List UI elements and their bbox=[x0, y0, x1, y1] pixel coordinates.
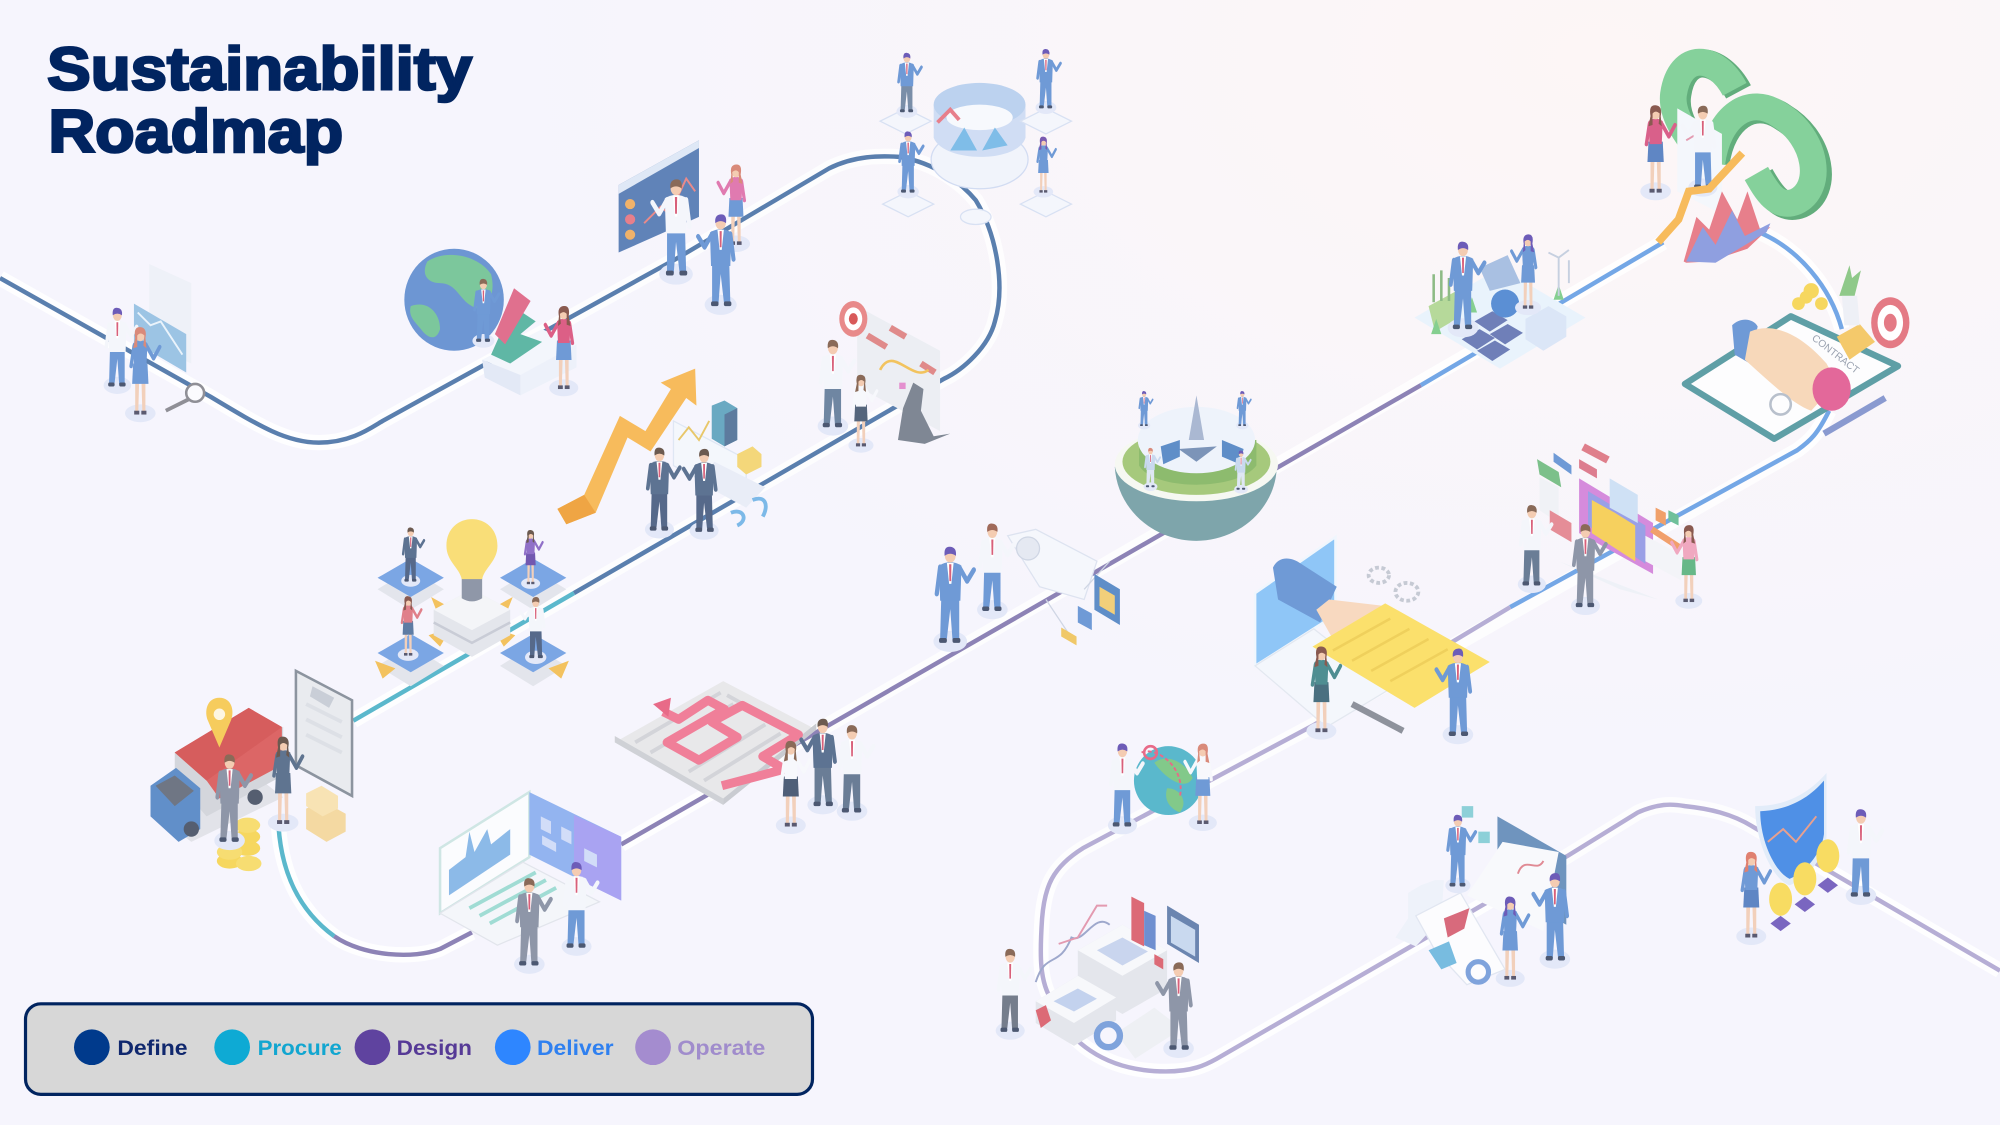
illustration: design monitor with cards bbox=[1518, 443, 1702, 615]
illustration: data board with team bbox=[619, 140, 750, 315]
path segment: deliver bbox=[1421, 232, 1842, 607]
illustration: maze bbox=[615, 681, 873, 834]
illustration: delivery truck and clipboard bbox=[151, 671, 352, 871]
illustration: eco platform bbox=[1415, 234, 1585, 369]
path segment: procure bbox=[278, 593, 574, 936]
title bbox=[47, 35, 473, 165]
legend item: define bbox=[74, 1029, 188, 1065]
illustration: analysts at chart bbox=[104, 264, 204, 422]
illustration: green cycle arrows and charts bbox=[1640, 62, 1818, 263]
title: Sustainability bbox=[47, 35, 473, 102]
legend item: design: Design bbox=[397, 1035, 472, 1060]
illustration: contract handshake bbox=[1685, 265, 1909, 439]
path segment: operate bbox=[1041, 607, 2000, 1071]
legend item: deliver bbox=[495, 1029, 614, 1065]
title: Roadmap bbox=[48, 98, 343, 165]
illustration: laptop hand and yellow document bbox=[1255, 537, 1490, 744]
illustration: laptop dashboard bbox=[440, 792, 621, 974]
contract label: CONTRACT bbox=[1809, 333, 1861, 376]
illustration: strategy board and chess bbox=[818, 301, 950, 453]
illustration: globe with two people bbox=[1108, 743, 1217, 834]
illustration: globe and desk bbox=[404, 249, 578, 396]
illustration: growth arrow and handshake bbox=[557, 369, 766, 540]
illustration: reports desk bbox=[996, 897, 1199, 1059]
legend item: procure bbox=[214, 1029, 342, 1065]
path segment: define bbox=[0, 156, 999, 593]
illustration: half globe with meeting table bbox=[1115, 391, 1278, 541]
illustration: report and tablet team bbox=[1395, 806, 1570, 987]
illustration: people with gears and panels bbox=[933, 524, 1120, 652]
legend item: operate bbox=[635, 1029, 765, 1065]
legend item: deliver: Deliver bbox=[537, 1035, 614, 1060]
legend item: operate: Operate bbox=[677, 1035, 765, 1060]
legend item: design bbox=[355, 1029, 472, 1065]
illustration: shield with coins bbox=[1736, 773, 1882, 945]
legend item: procure: Procure bbox=[258, 1035, 342, 1060]
legend panel bbox=[26, 1004, 813, 1094]
illustration: light bulb with four platforms bbox=[375, 519, 569, 686]
illustration: hologram ring with platforms bbox=[880, 49, 1071, 224]
path segment: design bbox=[334, 385, 1421, 955]
legend item: define: Define bbox=[117, 1035, 188, 1060]
